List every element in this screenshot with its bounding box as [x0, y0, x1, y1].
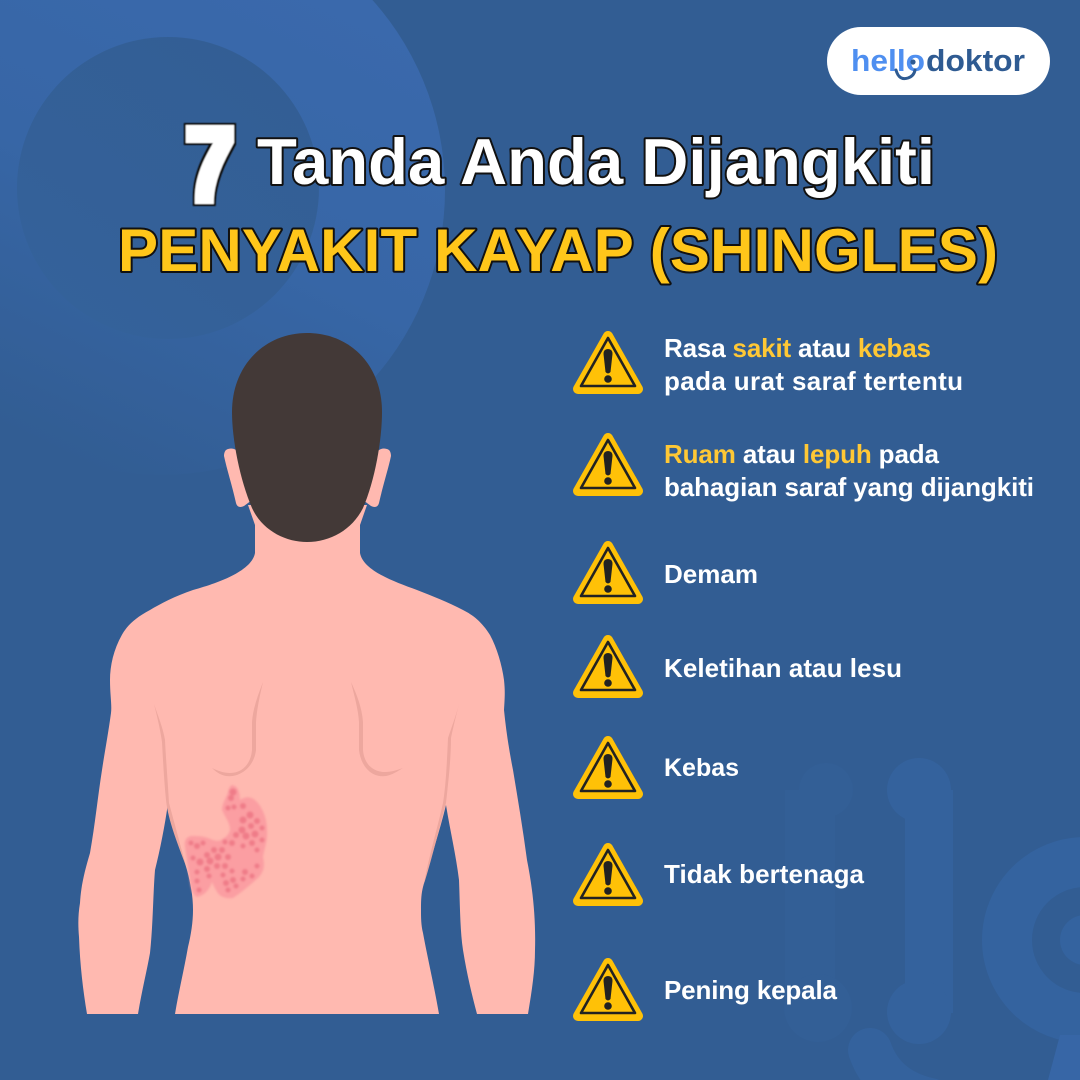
item 5 text: Kebas	[664, 754, 739, 782]
warning icon 7	[578, 963, 638, 1016]
logo: hellodoktor badge: doktor	[926, 43, 1025, 78]
item 1 text: pada urat saraf tertentu	[664, 366, 963, 396]
item 6 text: Tidak bertenaga	[664, 859, 865, 889]
warning icon 3	[578, 546, 638, 599]
background decoration: large circles	[0, 0, 445, 475]
hair	[232, 333, 382, 542]
warning icon 4	[578, 640, 638, 693]
item 3 text: Demam	[664, 559, 758, 589]
warning icon 5	[578, 741, 638, 794]
illustration: man's back with rash	[78, 333, 535, 1014]
warning icon 2	[578, 438, 638, 491]
item 1 text: Rasa sakit atau kebas	[664, 333, 931, 363]
item 2 text: bahagian saraf yang dijangkiti	[664, 472, 1034, 502]
background decoration: faded logo shapes	[784, 758, 1080, 1080]
back crease lines	[154, 682, 459, 884]
warning icon 6	[578, 848, 638, 901]
item 7 text: Pening kepala	[664, 975, 838, 1005]
title: line two: PENYAKIT KAYAP (SHINGLES)	[118, 217, 998, 284]
title: numeral 7: 7	[185, 106, 235, 224]
rash spots	[189, 789, 264, 892]
warning icon 1	[578, 336, 638, 389]
logo wordmark: hello	[851, 43, 925, 78]
item 4 text: Keletihan atau lesu	[664, 653, 902, 683]
logo: hellodoktor badge	[827, 27, 1050, 95]
ears	[224, 449, 391, 507]
body	[78, 505, 535, 1014]
rash halo	[185, 785, 267, 898]
item 2 text: Ruam atau lepuh pada	[664, 439, 939, 469]
title: line one: Tanda Anda Dijangkiti	[257, 125, 935, 198]
